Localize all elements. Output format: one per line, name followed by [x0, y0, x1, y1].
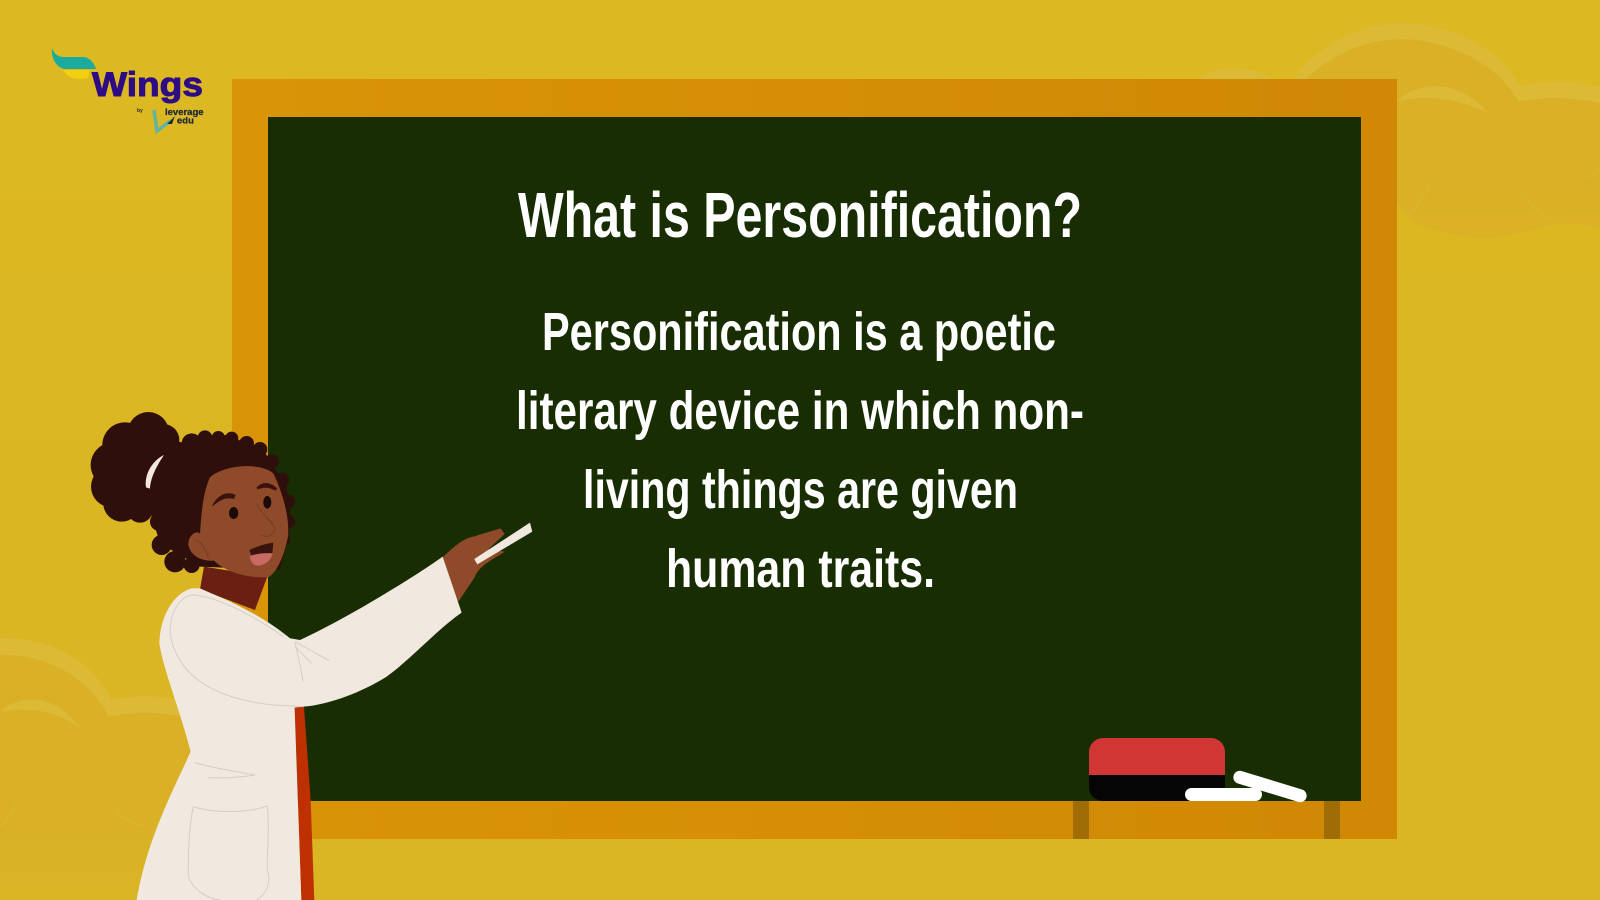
face	[188, 466, 288, 577]
cloud: bottom left	[0, 638, 193, 900]
lab coat	[137, 557, 462, 900]
chalk pieces	[1185, 769, 1308, 804]
facial features	[195, 483, 277, 566]
chalkboard frame	[232, 79, 1397, 839]
teacher illustration	[91, 412, 532, 900]
eraser	[1089, 738, 1225, 801]
logo: Wings by Leverage Edu	[52, 48, 204, 131]
definition text	[516, 302, 1084, 599]
hair tie	[146, 455, 164, 489]
definition text: living things are given	[583, 460, 1018, 520]
logo leverage mark	[154, 110, 175, 131]
title: What is Personification?	[518, 179, 1082, 251]
neck	[200, 567, 267, 610]
logo leverage edu text: edu	[177, 116, 194, 126]
coat seams and pocket	[170, 595, 329, 900]
definition text: human traits.	[666, 539, 935, 599]
tray pegs	[1073, 801, 1340, 839]
hand	[437, 528, 505, 602]
red dress strip	[295, 707, 314, 900]
definition text: literary device in which non-	[516, 381, 1084, 441]
logo swoosh	[52, 48, 96, 79]
definition text: Personification is a poetic	[542, 302, 1056, 362]
cloud: top right	[1198, 23, 1600, 237]
logo leverage edu text: leverage	[165, 107, 204, 118]
logo wordmark: Wings	[92, 66, 203, 104]
hand chalk	[474, 523, 532, 564]
hair bun	[91, 412, 179, 523]
hair main	[145, 430, 295, 573]
logo byline: by	[137, 108, 143, 114]
chalkboard surface	[268, 117, 1361, 801]
